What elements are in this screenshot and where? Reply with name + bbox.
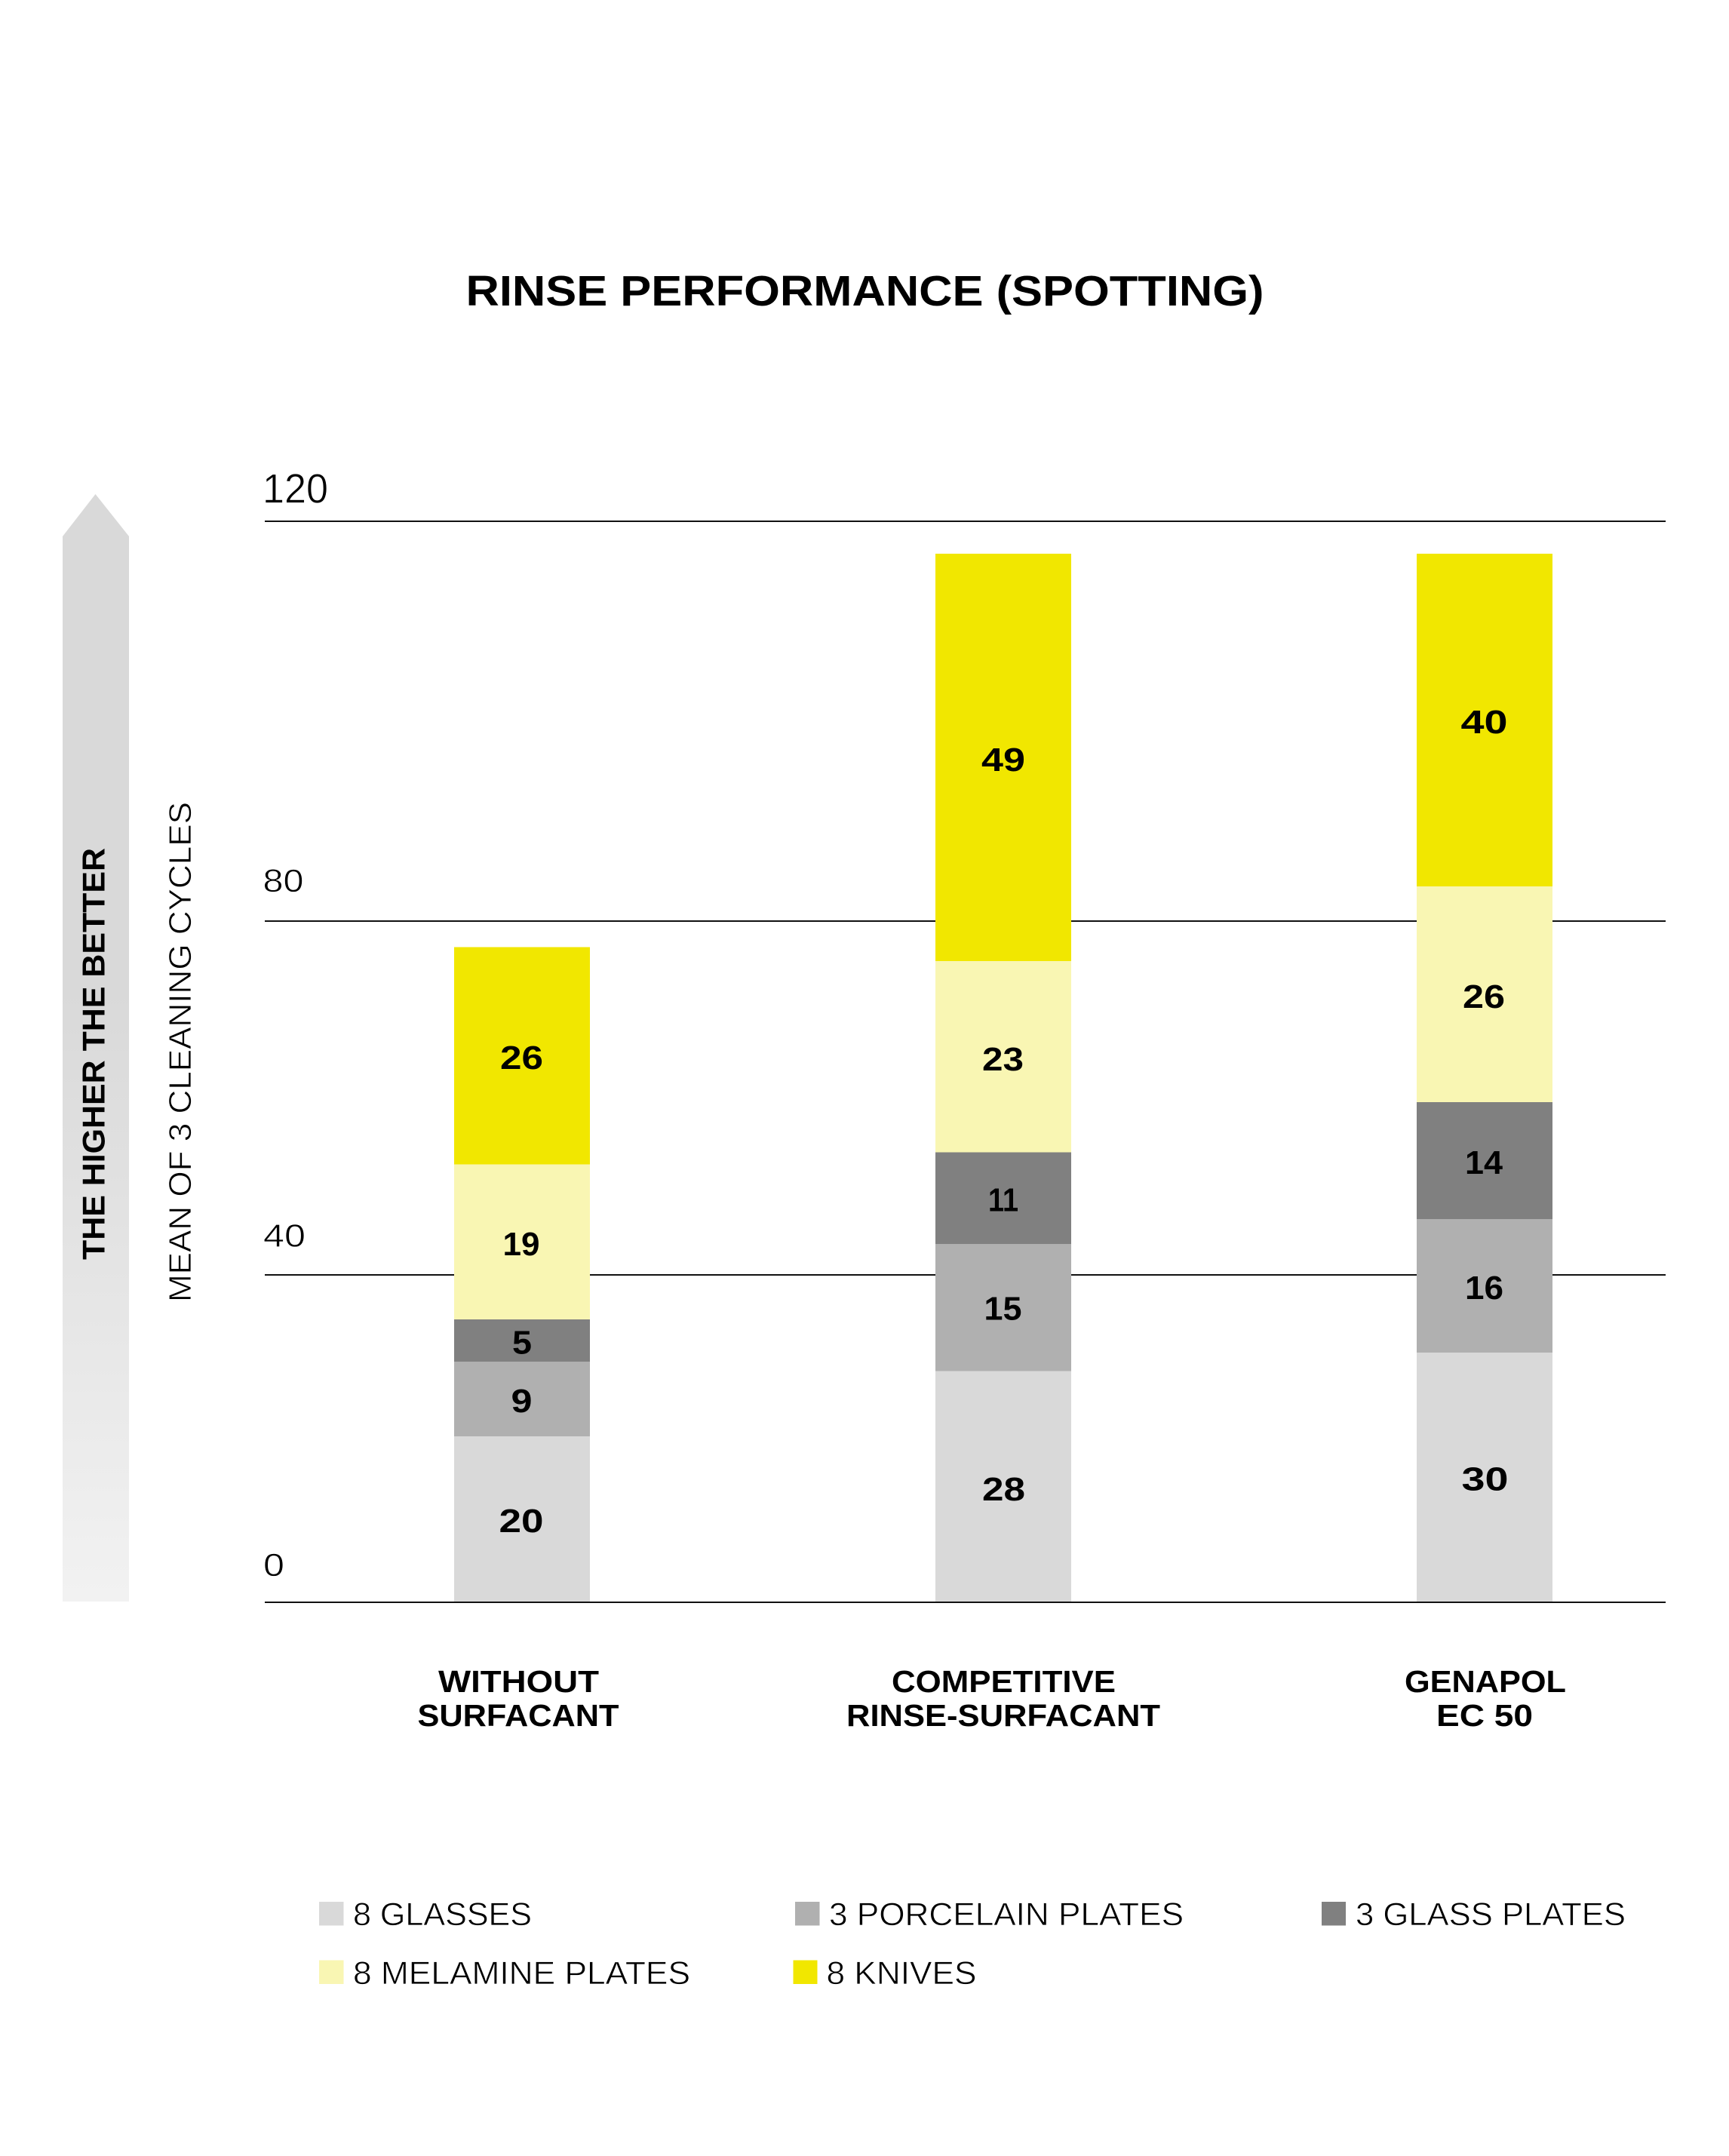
value 20: 20	[499, 1503, 543, 1540]
category label: competitive rinse-surfactant: RINSE-SURFACANT	[846, 1698, 1160, 1733]
category label: genapol ec 50: GENAPOL	[1405, 1664, 1566, 1699]
value 5: 5	[512, 1325, 532, 1361]
category label: genapol ec 50: EC 50	[1436, 1698, 1533, 1733]
value 16: 16	[1465, 1270, 1503, 1307]
legend: 8 knives: 8 KNIVES	[827, 1955, 976, 1992]
value 26: 26	[1463, 978, 1505, 1015]
bar: competitive rinse-surfactant	[935, 554, 1071, 1602]
tick 40: 40	[263, 1218, 306, 1254]
category label: without surfactant	[418, 1664, 619, 1733]
value 49: 49	[981, 742, 1025, 779]
value 26: 26	[500, 1040, 543, 1076]
tick 120: 120	[263, 465, 328, 511]
value 19: 19	[502, 1226, 540, 1263]
value 40: 40	[1460, 704, 1507, 741]
category label: competitive rinse-surfactant	[846, 1664, 1160, 1733]
y-axis title: MEAN OF 3 CLEANING CYCLES	[162, 802, 198, 1302]
category label: without surfactant: SURFACANT	[418, 1698, 619, 1733]
title: RINSE PERFORMANCE (SPOTTING)	[466, 267, 1264, 315]
category label: genapol ec 50	[1405, 1664, 1566, 1733]
category label: without surfactant: WITHOUT	[438, 1664, 599, 1699]
tick 80: 80	[263, 863, 303, 899]
value 15: 15	[984, 1290, 1021, 1328]
arrow label: THE HIGHER THE BETTER	[75, 848, 112, 1260]
category label: competitive rinse-surfactant: COMPETITIVE	[892, 1664, 1116, 1699]
tick 0: 0	[263, 1547, 284, 1583]
value 11: 11	[988, 1181, 1018, 1219]
value 14: 14	[1465, 1144, 1503, 1181]
value 30: 30	[1462, 1460, 1509, 1498]
value 9: 9	[511, 1383, 533, 1420]
value 28: 28	[982, 1471, 1025, 1508]
legend: 8 glasses: 8 GLASSES	[353, 1896, 532, 1933]
legend	[319, 1896, 1626, 1992]
arrow: the higher the better	[63, 494, 129, 1602]
legend: 8 melamine plates: 8 MELAMINE PLATES	[353, 1955, 690, 1992]
legend: 3 porcelain plates: 3 PORCELAIN PLATES	[829, 1896, 1184, 1933]
value 23: 23	[982, 1041, 1024, 1078]
bar: genapol ec 50	[1417, 554, 1552, 1602]
bar: without surfactant	[454, 947, 590, 1602]
y axis: grid lines and tick labels	[263, 465, 1666, 1603]
legend: 3 glass plates: 3 GLASS PLATES	[1356, 1896, 1626, 1933]
